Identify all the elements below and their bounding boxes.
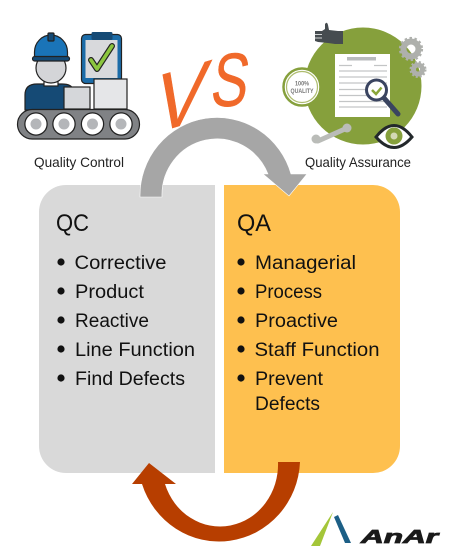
- list: QA traits: Proactive: [255, 311, 338, 332]
- icon: eye: [376, 126, 412, 148]
- rollers: [28, 116, 129, 132]
- list: QA traits: Defects: [255, 394, 320, 415]
- arrow: grey QC to QA: [140, 118, 307, 197]
- label: Quality Control: Quality Control: [34, 154, 124, 170]
- panel: QA: [224, 185, 400, 473]
- list: QC traits: [57, 253, 195, 390]
- list: QA traits: [237, 253, 380, 415]
- panel: QC: [39, 185, 215, 473]
- list: QC traits: Product: [75, 282, 145, 303]
- boxes: [64, 87, 90, 109]
- magnifier: [366, 80, 398, 114]
- list: QC traits: Corrective: [74, 253, 166, 274]
- title: VS: V: [147, 40, 216, 153]
- worker face: [36, 53, 66, 83]
- list: QC traits: Find Defects: [75, 369, 185, 390]
- clipboard: [82, 32, 122, 84]
- list: QA traits: Prevent: [255, 369, 324, 390]
- logo: AnAr: [311, 512, 440, 547]
- badge: 100% quality: 100%: [295, 82, 310, 88]
- icon: quality assurance: [284, 23, 426, 147]
- helmet: [32, 33, 70, 61]
- badge: 100% quality: QUALITY: [290, 89, 314, 95]
- heading: QC: QC: [56, 210, 89, 237]
- title: VS: [147, 39, 255, 153]
- logo: AnAr: AnAr: [359, 527, 440, 547]
- icon: quality control worker and conveyor: [18, 32, 140, 139]
- icon: gears: [400, 38, 426, 77]
- list: QA traits: Managerial: [255, 253, 356, 274]
- icon: glove thumb up: [315, 23, 343, 44]
- title: VS: S: [207, 39, 255, 123]
- arrow: red QA to QC: [132, 462, 300, 541]
- list: QC traits: Reactive: [75, 311, 149, 332]
- document: [335, 54, 390, 117]
- heading: QA: QA: [237, 210, 271, 237]
- worker body: [25, 84, 73, 110]
- list: QC traits: Line Function: [75, 340, 195, 361]
- list: QA traits: Staff Function: [254, 340, 380, 361]
- icon: wrench: [312, 124, 352, 144]
- list: QA traits: Process: [255, 282, 322, 303]
- badge: 100% quality: [284, 68, 320, 106]
- conveyor: [18, 110, 140, 139]
- label: Quality Assurance: Quality Assurance: [305, 154, 411, 170]
